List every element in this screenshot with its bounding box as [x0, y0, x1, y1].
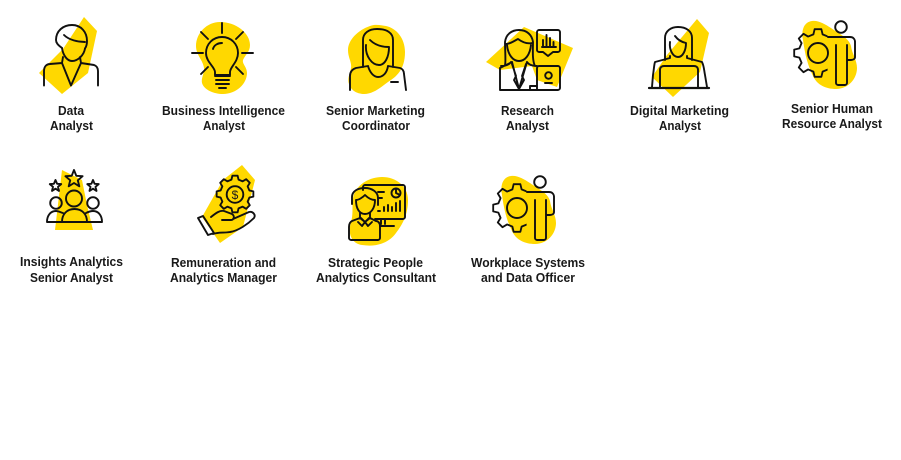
label: Digital Marketing Analyst: Analyst [659, 119, 702, 133]
label: Business Intelligence Analyst: Business Intelligence [162, 104, 285, 118]
icon: hand holding gear with dollar: $ [232, 188, 239, 202]
label: Remuneration and Analytics Manager: Analytics Manager [170, 271, 277, 285]
label: Research Analyst [501, 104, 554, 133]
label: Strategic People Analytics Consultant: Analytics Consultant [316, 271, 437, 285]
label: Research Analyst: Research [501, 104, 554, 118]
label: Senior Marketing Coordinator [326, 104, 425, 133]
icon: data analyst person [39, 17, 98, 94]
label: Workplace Systems and Data Officer: Workplace Systems [471, 256, 585, 270]
icon: marketing coordinator woman [348, 25, 406, 94]
label: Research Analyst: Analyst [506, 119, 550, 133]
icon: team with stars [47, 170, 102, 230]
label: Remuneration and Analytics Manager [170, 256, 277, 285]
label: Workplace Systems and Data Officer: and Data Officer [481, 271, 575, 285]
label: Digital Marketing Analyst [630, 104, 729, 133]
label: Senior Marketing Coordinator: Coordinator [342, 119, 410, 133]
label: Data Analyst [50, 104, 94, 133]
label: Strategic People Analytics Consultant: Strategic People [328, 256, 423, 270]
card: Senior Human Resource Analyst [782, 21, 883, 131]
card: Remuneration and Analytics Manager [170, 165, 277, 285]
label: Insights Analytics Senior Analyst: Senior Analyst [30, 271, 114, 285]
card: Business Intelligence Analyst [162, 22, 285, 133]
label: Senior Human Resource Analyst [782, 102, 883, 131]
card: Data Analyst [39, 17, 98, 133]
card: Workplace Systems and Data Officer [471, 176, 585, 285]
label: Business Intelligence Analyst: Analyst [203, 119, 246, 133]
label: Insights Analytics Senior Analyst: Insights Analytics [20, 255, 123, 269]
card: Senior Marketing Coordinator [326, 25, 425, 133]
card: Insights Analytics Senior Analyst [20, 170, 123, 285]
label: Remuneration and Analytics Manager: Remuneration and [171, 256, 276, 270]
card: Research Analyst [486, 27, 573, 133]
label: Business Intelligence Analyst [162, 104, 285, 133]
label: Digital Marketing Analyst: Digital Marketing [630, 104, 729, 118]
label: Strategic People Analytics Consultant [316, 256, 437, 285]
card: Digital Marketing Analyst [630, 19, 729, 133]
label: Workplace Systems and Data Officer [471, 256, 585, 285]
icon: light bulb [192, 22, 253, 94]
icon: research analyst [486, 27, 573, 90]
icon: consultant with dashboard screen [349, 177, 408, 246]
icon: digital marketing woman at laptop [649, 19, 709, 97]
label: Insights Analytics Senior Analyst [20, 255, 123, 285]
icon: gear and person [493, 176, 556, 244]
card: Strategic People Analytics Consultant [316, 177, 437, 285]
label: Senior Human Resource Analyst: Senior Human [791, 102, 873, 116]
label: Data Analyst: Data [58, 104, 85, 118]
icon: gear and person [794, 21, 857, 89]
label: Data Analyst: Analyst [50, 119, 94, 133]
label: Senior Human Resource Analyst: Resource Analyst [782, 117, 883, 131]
label: Senior Marketing Coordinator: Senior Marketing [326, 104, 425, 118]
